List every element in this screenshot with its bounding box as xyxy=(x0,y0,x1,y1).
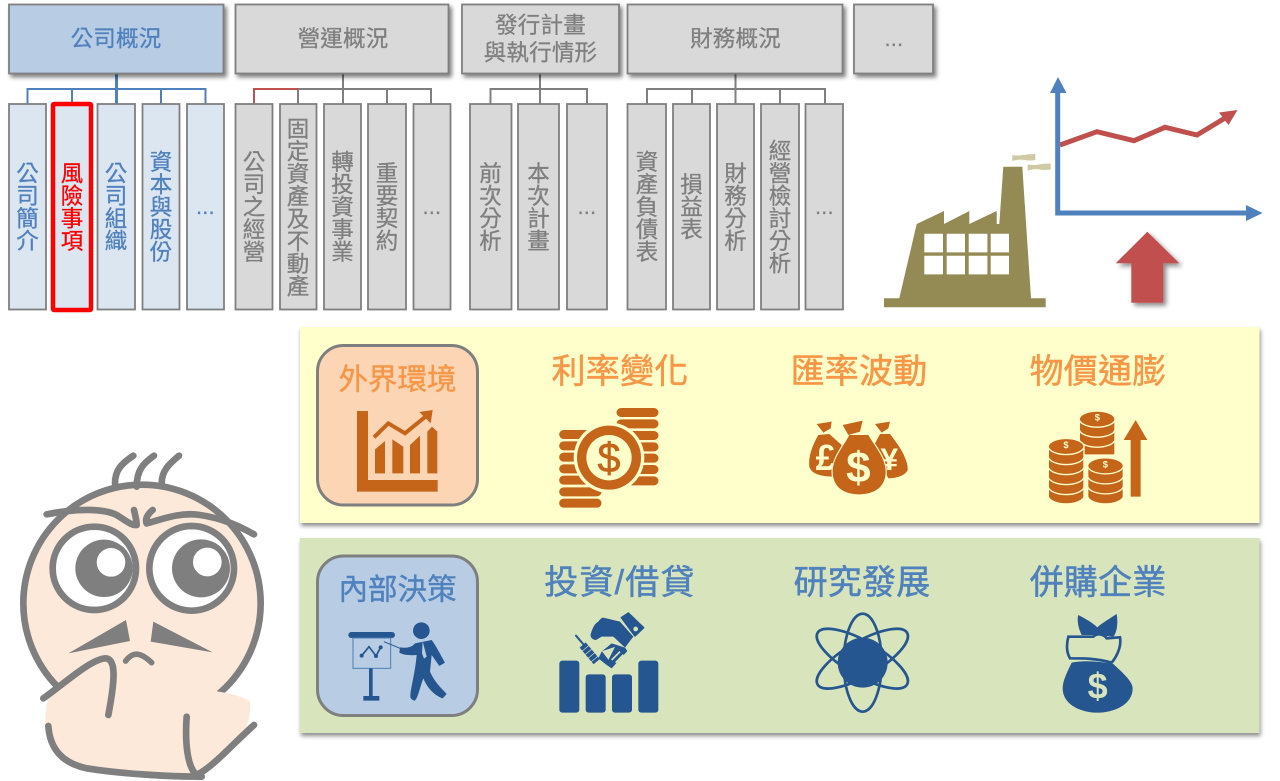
eyebrows xyxy=(47,510,254,534)
heading box: 發行計畫與執行情形: 發行計畫 xyxy=(495,13,586,38)
item: 資產負債表: 資產負債表 xyxy=(633,150,658,263)
icon: coin stacks with up arrow: $ xyxy=(1095,413,1101,423)
item: 資本與股份 xyxy=(142,104,180,310)
item: more: ... xyxy=(815,196,834,219)
heading box: more xyxy=(854,4,933,74)
icon: three money bags xyxy=(809,421,908,494)
item: 公司簡介 xyxy=(9,104,46,310)
item: 資本與股份: 資本與股份 xyxy=(147,150,172,263)
hand and chin xyxy=(46,660,250,775)
left eye xyxy=(53,527,136,610)
heading: 匯率波動: 匯率波動 xyxy=(791,353,927,391)
icon: coin stacks with up arrow xyxy=(1048,411,1147,504)
heading: 併購企業: 併購企業 xyxy=(1030,564,1166,602)
item: more xyxy=(567,104,607,310)
item: 經營檢討分析: 經營檢討分析 xyxy=(766,139,791,274)
icon: coins with dollar: $ xyxy=(597,435,620,481)
item: 公司之經營: 公司之經營 xyxy=(240,150,265,263)
item: more: ... xyxy=(578,196,596,219)
item: 財務分析: 財務分析 xyxy=(722,161,747,252)
item: 前次分析 xyxy=(470,104,512,310)
heading box: 財務概況: 財務概況 xyxy=(690,26,781,52)
item: more xyxy=(187,104,224,310)
icon: presenter at board xyxy=(348,622,447,701)
category card: 外界環境: 外界環境 xyxy=(338,364,457,396)
category card: 內部決策: 內部決策 xyxy=(338,574,457,606)
connectors: financial overview xyxy=(647,73,825,104)
panel: internal decisions xyxy=(300,538,1260,733)
icon: three money bags: £ xyxy=(816,437,836,478)
hair xyxy=(115,456,179,487)
category card: 內部決策 xyxy=(318,556,478,716)
item: 轉投資事業: 轉投資事業 xyxy=(328,150,354,263)
item: 固定資產及不動產: 固定資產及不動產 xyxy=(284,117,309,297)
item: 公司簡介: 公司簡介 xyxy=(14,162,39,252)
icon: money sack: $ xyxy=(1088,666,1108,707)
item: more xyxy=(806,104,843,310)
item: 固定資產及不動產 xyxy=(280,104,316,310)
heading box: 營運概況: 營運概況 xyxy=(298,26,388,52)
item: 損益表 xyxy=(673,104,710,310)
item: 轉投資事業 xyxy=(324,104,361,310)
item: 資產負債表 xyxy=(628,104,666,310)
icon: handshake over bars xyxy=(559,613,658,713)
heading box: 發行計畫與執行情形: 與執行情形 xyxy=(484,40,597,66)
heading box: more: ... xyxy=(885,28,903,51)
arrow: red up arrow xyxy=(1116,232,1179,303)
connectors: issuance plan xyxy=(490,73,587,104)
icon: coins with dollar xyxy=(559,408,658,508)
item: 重要契約 xyxy=(368,104,406,310)
item: more: ... xyxy=(423,196,441,219)
heading box: 營運概況 xyxy=(236,4,448,74)
item: 前次分析: 前次分析 xyxy=(476,161,502,252)
heading box: 財務概況 xyxy=(628,4,842,74)
item: 本次計畫 xyxy=(518,104,559,310)
line chart with rising trend xyxy=(1050,77,1263,221)
right eye xyxy=(149,526,234,611)
icon: three money bags: $ xyxy=(846,444,871,493)
heading: 物價通膨: 物價通膨 xyxy=(1030,353,1166,391)
icon: coin stacks with up arrow: $ xyxy=(1063,440,1069,450)
org chart: table of contents xyxy=(9,4,933,310)
connectors: operations overview xyxy=(254,73,431,104)
panel: external environment xyxy=(300,327,1260,523)
icon: atom xyxy=(809,614,916,712)
item: 公司之經營 xyxy=(236,104,272,310)
character: thinking face xyxy=(23,456,261,777)
head xyxy=(23,485,261,722)
heading box: 公司概況: 公司概況 xyxy=(71,26,161,52)
item: 公司組織 xyxy=(98,104,135,310)
item: 損益表: 損益表 xyxy=(678,173,703,241)
item: 重要契約: 重要契約 xyxy=(373,161,398,252)
item: 本次計畫: 本次計畫 xyxy=(524,161,550,252)
heading box: 公司概況 xyxy=(9,4,224,74)
item highlighted: 風險事項: 風險事項 xyxy=(58,162,83,252)
icon: factory xyxy=(884,154,1051,307)
item: 財務分析 xyxy=(717,104,754,310)
heading: 投資/借貸: 投資/借貸 xyxy=(544,564,696,602)
item: more: ... xyxy=(196,196,215,219)
connectors: company overview xyxy=(28,73,206,104)
nose xyxy=(126,654,152,663)
icon: growth chart xyxy=(357,410,438,492)
icon: three money bags: ¥ xyxy=(881,441,899,477)
heading box: 發行計畫與執行情形 xyxy=(462,4,619,74)
item: 經營檢討分析 xyxy=(761,104,799,310)
item highlighted: 風險事項 xyxy=(53,104,91,310)
item: more xyxy=(414,104,450,310)
moustache xyxy=(68,620,213,653)
hand outline xyxy=(43,658,254,777)
heading: 研究發展: 研究發展 xyxy=(794,564,930,602)
heading: 利率變化: 利率變化 xyxy=(552,353,688,391)
category card: 外界環境 xyxy=(318,346,478,505)
icon: coin stacks with up arrow: $ xyxy=(1103,459,1109,469)
item: 公司組織: 公司組織 xyxy=(102,162,127,252)
icon: money sack xyxy=(1063,614,1133,713)
